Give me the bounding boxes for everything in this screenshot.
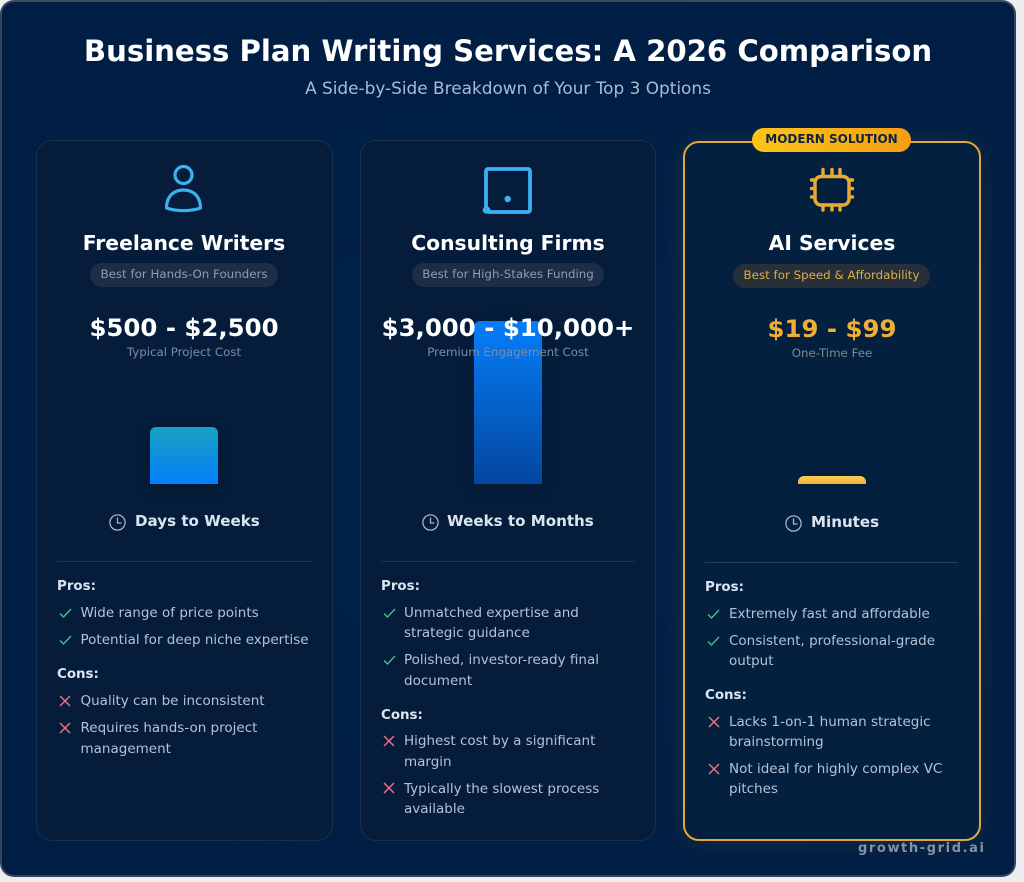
- price caption: consulting: Premium Engagement Cost: [427, 345, 589, 359]
- icon: check: [60, 636, 72, 645]
- icon: check: [60, 608, 72, 618]
- price: freelance: $500 - $2,500: [89, 313, 279, 342]
- con item: Lacks 1-on-1 human strategic: [729, 714, 931, 730]
- pro item: [404, 652, 599, 688]
- watermark: growth-grid.ai: [858, 841, 986, 856]
- timeline: consulting: Weeks to Months: [447, 512, 594, 530]
- con item: margin: [404, 754, 452, 770]
- badge: best for hands-on founders: [90, 263, 278, 287]
- con item: pitches: [729, 781, 778, 797]
- heading: AI services: AI Services: [769, 231, 895, 255]
- panel: consulting firms: [360, 140, 656, 841]
- con item: Quality can be inconsistent: [80, 693, 265, 709]
- icon: cross: [384, 736, 394, 746]
- pro item: Potential for deep niche expertise: [80, 632, 309, 648]
- panel: freelance writers: [36, 140, 333, 841]
- pros heading: freelance: Pros:: [57, 579, 96, 594]
- icon: check: [708, 636, 720, 646]
- icon: cross: [384, 782, 394, 794]
- price: AI: $19 - $99: [768, 314, 896, 343]
- con item: Typically the slowest process: [404, 781, 599, 797]
- con item: [729, 761, 942, 797]
- pro item: output: [729, 653, 774, 669]
- heading: freelance writers: Freelance Writers: [83, 231, 285, 255]
- subtitle: A Side-by-Side Breakdown of Your Top 3 Options: [305, 78, 711, 98]
- cons heading: freelance: Cons:: [57, 667, 99, 682]
- price caption: AI: One-Time Fee: [792, 346, 872, 360]
- pro item: Consistent, professional-grade: [729, 633, 935, 649]
- pro item: Unmatched expertise and: [404, 605, 579, 621]
- pro item: [404, 605, 579, 641]
- price caption: freelance: Typical Project Cost: [127, 345, 241, 359]
- pro item: strategic guidance: [404, 625, 530, 641]
- icon: check: [384, 608, 396, 618]
- badge: best for high-stakes funding: [412, 263, 604, 287]
- pro item: [729, 633, 935, 669]
- timeline: freelance: Days to Weeks: [135, 512, 260, 530]
- con item: Not ideal for highly complex VC: [729, 761, 942, 777]
- icon: tablet: [482, 167, 532, 214]
- title: Business Plan Writing Services: A 2026 Comparison: [84, 34, 932, 68]
- icon: chip: [810, 168, 854, 212]
- pros heading: consulting: Pros:: [381, 579, 420, 594]
- con item: management: [80, 740, 171, 756]
- bar: freelance cost: [150, 427, 218, 484]
- pro item: document: [404, 672, 472, 688]
- icon: check: [384, 656, 396, 665]
- heading: consulting firms: Consulting Firms: [411, 231, 605, 255]
- badge: modern solution: [752, 128, 911, 152]
- con item: [404, 781, 599, 817]
- con item: [80, 720, 258, 756]
- cons heading: AI: Cons:: [705, 688, 747, 703]
- pro item: Wide range of price points: [80, 605, 259, 621]
- con item: brainstorming: [729, 734, 824, 750]
- price: consulting: $3,000 - $10,000+: [382, 313, 634, 342]
- bar: consulting cost: [474, 321, 542, 484]
- badge: best for speed and affordability: Best for Speed & Affordability: [744, 268, 919, 282]
- badge: best for high-stakes funding: Best for High-Stakes Funding: [422, 267, 594, 281]
- badge: best for speed and affordability: [733, 264, 930, 288]
- panel: AI services: [683, 141, 981, 841]
- icon: cross: [60, 722, 70, 734]
- badge: modern solution: MODERN SOLUTION: [765, 132, 898, 146]
- pro item: Extremely fast and affordable: [729, 606, 930, 622]
- con item: [404, 733, 596, 770]
- con item: available: [404, 801, 465, 817]
- bar: AI cost: [798, 476, 866, 484]
- icon: clock: [422, 514, 439, 531]
- icon: cross: [60, 696, 70, 706]
- icon: check: [708, 610, 720, 619]
- badge: best for hands-on founders: Best for Hands-On Founders: [100, 267, 268, 281]
- icon: cross: [708, 764, 720, 774]
- icon: clock: [109, 514, 126, 531]
- cons heading: consulting: Cons:: [381, 708, 423, 723]
- icon: clock: [785, 515, 802, 532]
- con item: Requires hands-on project: [80, 720, 257, 736]
- con item: [729, 714, 931, 750]
- icon: cross: [708, 716, 720, 728]
- timeline: AI: Minutes: [811, 513, 879, 531]
- pros heading: AI: Pros:: [705, 580, 744, 595]
- pro item: Polished, investor-ready final: [404, 652, 599, 668]
- icon: person: [164, 164, 202, 212]
- con item: Highest cost by a significant: [404, 733, 595, 749]
